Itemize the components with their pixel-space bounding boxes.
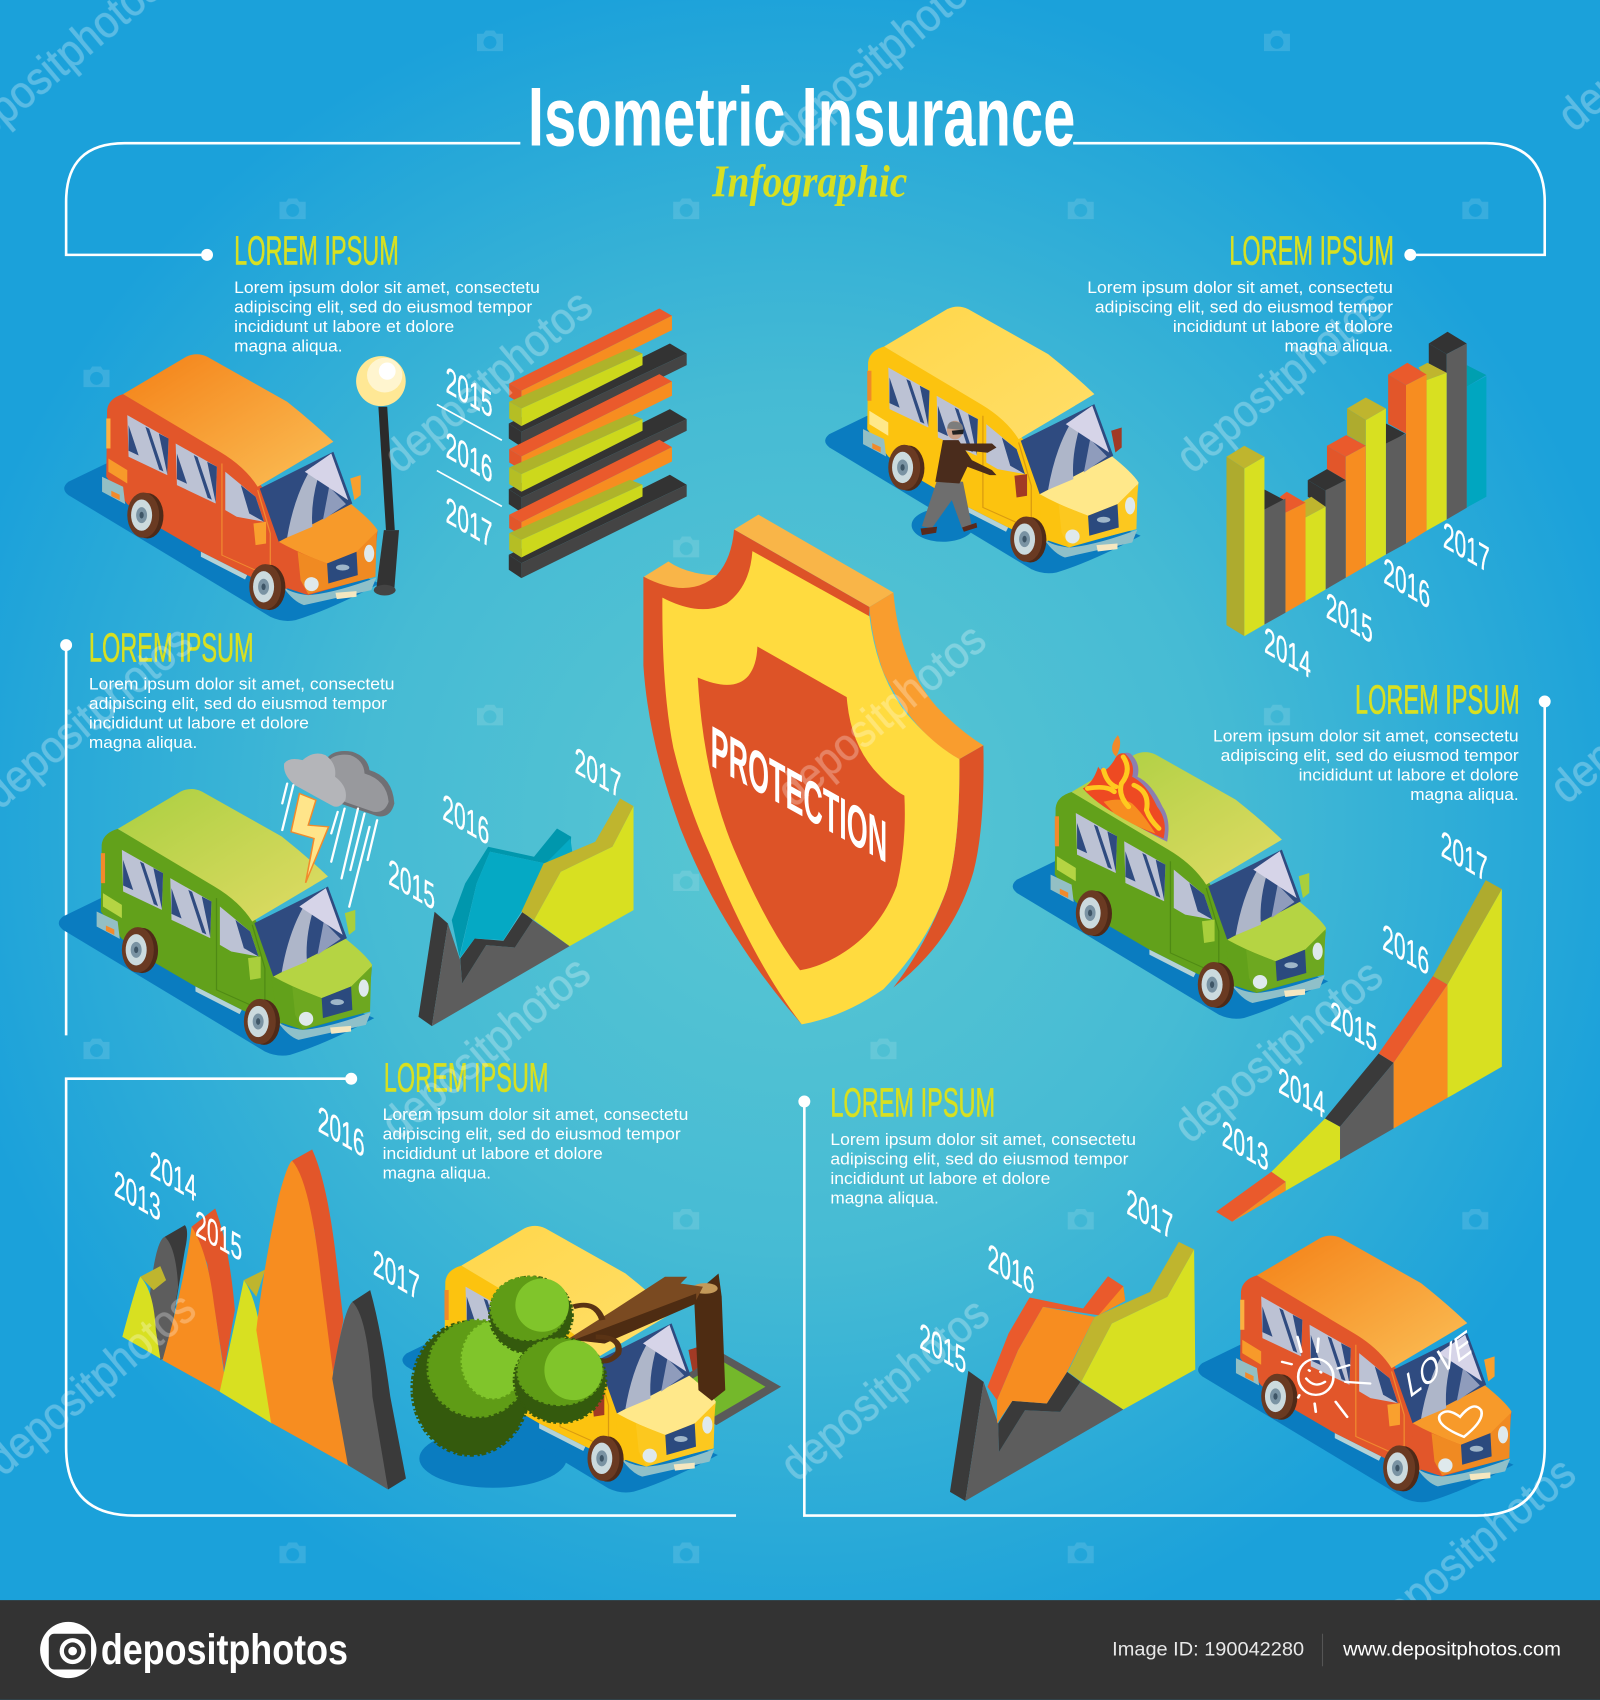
chart: area chart teal xyxy=(418,798,634,1026)
text block middle left xyxy=(89,624,395,752)
icon: thief xyxy=(912,421,996,542)
year labels: area chart orange xyxy=(919,1180,1173,1383)
year labels: area chart teal: 2015 xyxy=(388,851,435,919)
logo text: depositphotos xyxy=(101,1626,348,1673)
chart: area chart orange xyxy=(950,1242,1195,1501)
frame bottom left xyxy=(66,1073,736,1516)
icon: street lamp xyxy=(356,356,406,595)
text block bottom left: incididunt ut labore et dolore xyxy=(383,1144,603,1163)
icon: planter plot xyxy=(419,1353,781,1488)
text block bottom left: magna aliqua. xyxy=(383,1163,491,1182)
text block middle right xyxy=(1213,676,1520,804)
text block top left: LOREM IPSUM xyxy=(234,228,399,274)
van: orange with street lamp xyxy=(64,354,406,621)
site url: www.depositphotos.com xyxy=(1342,1638,1561,1660)
year labels: 3D bars: 2015 xyxy=(1326,584,1373,652)
year labels: rising area chart: 2017 xyxy=(1441,822,1488,891)
year labels: horizontal bars: 2015 xyxy=(446,358,492,427)
text block top right xyxy=(1087,228,1394,355)
footer bar xyxy=(0,1600,1600,1700)
year labels: rising area chart: 2016 xyxy=(1382,916,1429,984)
frame left xyxy=(60,639,72,1035)
watermarks: depositphotos xyxy=(1357,1447,1585,1650)
icon: storm cloud xyxy=(282,751,394,907)
year labels: 3D bars: 2016 xyxy=(1383,549,1430,617)
icon: graffiti sun and heart xyxy=(1282,1337,1482,1437)
text block top right: incididunt ut labore et dolore xyxy=(1173,317,1393,336)
text block middle right: Lorem ipsum dolor sit amet, consectetu xyxy=(1213,727,1519,746)
text block middle right: magna aliqua. xyxy=(1410,785,1519,804)
text block bottom left: adipiscing elit, sed do eiusmod tempor xyxy=(383,1124,681,1143)
year labels: 3D bars xyxy=(1264,513,1490,687)
shield label: PROTECTION xyxy=(711,713,887,876)
text block middle right: incididunt ut labore et dolore xyxy=(1299,766,1519,785)
year labels: rising area chart xyxy=(1222,822,1488,1180)
watermarks: depositphotos xyxy=(374,279,602,482)
chart: 3D bars 2014-2017 xyxy=(1226,332,1486,636)
text block bottom left: LOREM IPSUM xyxy=(384,1055,549,1101)
year labels: mountain peaks xyxy=(114,1098,420,1309)
watermarks: depositphotos xyxy=(767,613,995,816)
title: Isometric Insurance xyxy=(528,69,1075,163)
watermarks: depositphotos xyxy=(770,1287,998,1490)
van: orange with graffiti xyxy=(1198,1236,1514,1502)
frame right xyxy=(798,696,1551,1516)
text block bottom left xyxy=(383,1055,688,1182)
watermarks: depositphotos xyxy=(1164,949,1392,1152)
text block bottom left: Lorem ipsum dolor sit amet, consectetu xyxy=(383,1105,688,1124)
chart: horizontal isometric bars xyxy=(509,308,687,578)
year labels: 3D bars: 2017 xyxy=(1443,513,1490,582)
graffiti word: LOVE xyxy=(1404,1322,1474,1407)
frame top right xyxy=(1073,143,1545,261)
image id: Image ID: 190042280 xyxy=(1112,1638,1304,1660)
year labels: mountain peaks: 2017 xyxy=(373,1241,420,1309)
year labels: area chart orange: 2017 xyxy=(1126,1180,1173,1248)
icon: fire xyxy=(1083,735,1169,842)
text block top right: LOREM IPSUM xyxy=(1229,228,1394,274)
year labels: area chart teal: 2016 xyxy=(442,786,489,854)
text block top left: incididunt ut labore et dolore xyxy=(234,317,454,336)
text block bottom right xyxy=(830,1080,1136,1207)
van: yellow with thief xyxy=(825,307,1141,573)
text block middle left: adipiscing elit, sed do eiusmod tempor xyxy=(89,694,387,713)
year labels: area chart teal: 2017 xyxy=(575,739,621,807)
year labels: area chart orange: 2016 xyxy=(988,1235,1034,1304)
shield: protection xyxy=(643,515,984,1024)
van: yellow hit by tree xyxy=(402,1226,781,1493)
text block bottom right: magna aliqua. xyxy=(830,1188,939,1207)
year labels: area chart teal xyxy=(388,739,621,919)
year labels: horizontal bars: 2017 xyxy=(446,489,492,557)
year labels: rising area chart: 2013 xyxy=(1222,1112,1269,1180)
frame top left xyxy=(66,143,520,261)
year labels: mountain peaks: 2013 xyxy=(114,1162,161,1230)
text block middle left: magna aliqua. xyxy=(89,733,197,752)
logo icon xyxy=(40,1622,96,1678)
van: green with storm xyxy=(59,751,394,1056)
text block top right: Lorem ipsum dolor sit amet, consectetu xyxy=(1087,278,1393,297)
text block bottom right: adipiscing elit, sed do eiusmod tempor xyxy=(830,1149,1129,1168)
text block bottom right: LOREM IPSUM xyxy=(830,1080,995,1126)
year labels: 3D bars: 2014 xyxy=(1264,619,1311,687)
text block middle left: Lorem ipsum dolor sit amet, consectetu xyxy=(89,675,395,694)
year labels: mountain peaks: 2016 xyxy=(318,1098,365,1166)
text block middle left: incididunt ut labore et dolore xyxy=(89,714,309,733)
chart: rising area chart xyxy=(1216,880,1502,1222)
year labels: mountain peaks: 2015 xyxy=(195,1202,242,1270)
chart: mountain peaks xyxy=(122,1149,406,1489)
text block top left: adipiscing elit, sed do eiusmod tempor xyxy=(234,297,533,316)
text block bottom right: Lorem ipsum dolor sit amet, consectetu xyxy=(830,1130,1136,1149)
year labels: mountain peaks: 2014 xyxy=(150,1142,197,1210)
text block top right: adipiscing elit, sed do eiusmod tempor xyxy=(1095,297,1393,316)
year labels: rising area chart: 2014 xyxy=(1278,1059,1325,1127)
subtitle: Infographic xyxy=(711,155,907,206)
year labels: rising area chart: 2015 xyxy=(1330,993,1377,1061)
text block top right: magna aliqua. xyxy=(1285,336,1393,355)
text block top left xyxy=(234,228,540,355)
van: green on fire xyxy=(1013,735,1328,1019)
watermarks: depositphotos xyxy=(1166,279,1394,482)
year labels: horizontal bars xyxy=(437,358,502,557)
year labels: area chart orange: 2015 xyxy=(919,1315,966,1383)
icon: fallen tree xyxy=(413,1273,725,1455)
year labels: horizontal bars: 2016 xyxy=(446,424,492,492)
watermark camera icons xyxy=(83,30,1488,1563)
text block bottom right: incididunt ut labore et dolore xyxy=(830,1169,1050,1188)
text block top left: magna aliqua. xyxy=(234,336,343,355)
text block middle left: LOREM IPSUM xyxy=(89,624,254,670)
text block top left: Lorem ipsum dolor sit amet, consectetu xyxy=(234,278,540,297)
watermarks: depositphotos xyxy=(371,946,599,1149)
text block middle right: adipiscing elit, sed do eiusmod tempor xyxy=(1221,746,1519,765)
